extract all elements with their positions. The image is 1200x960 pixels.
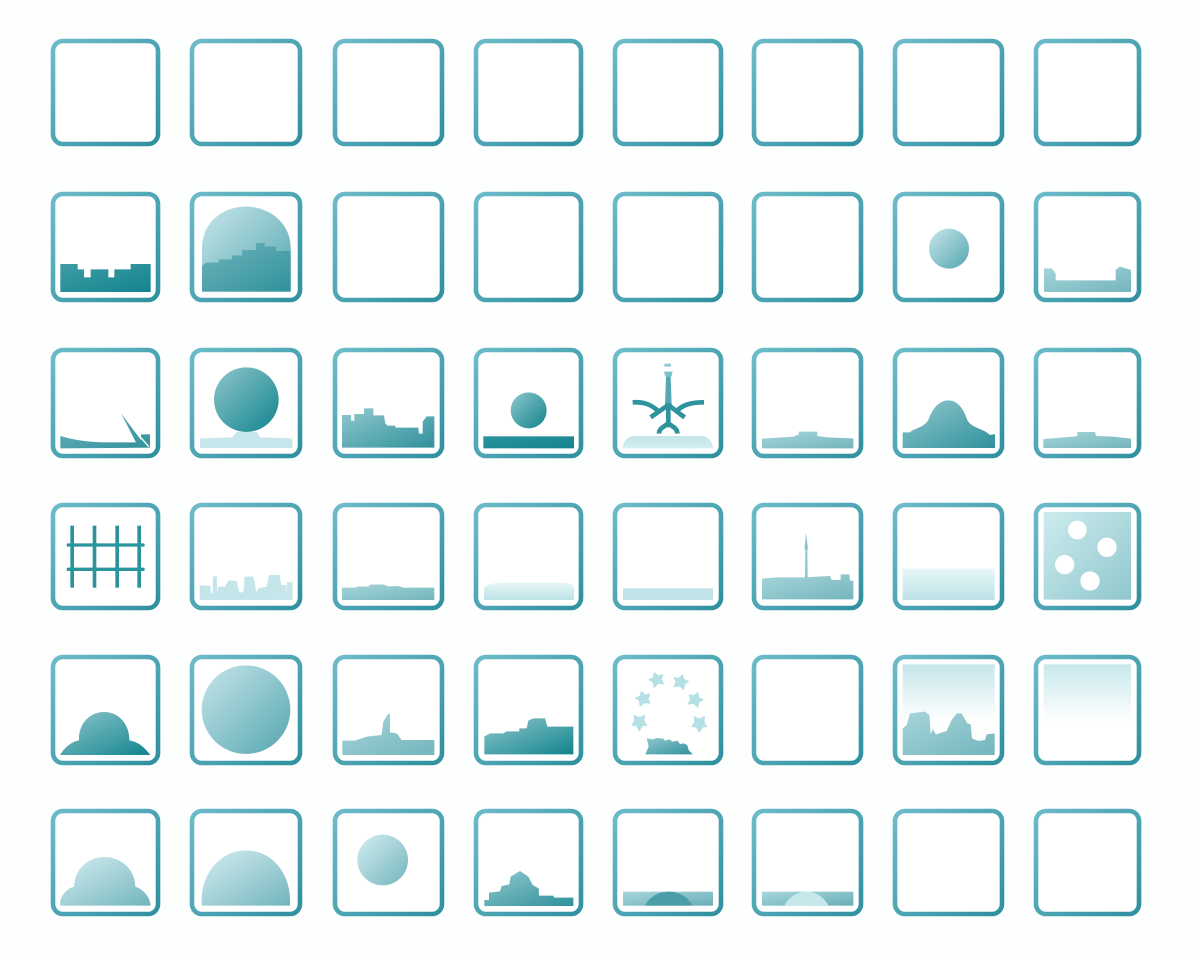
- icon: sphere over bar: [483, 392, 574, 448]
- tile r2c3: empty: [335, 194, 442, 300]
- icon: pale mound: [484, 583, 574, 600]
- tile r6c3: circle: [335, 811, 442, 914]
- tile r4c6: tower and town: [754, 505, 861, 608]
- icon: lattice: [67, 526, 145, 588]
- tile r2c2: dome with skyline: [192, 194, 300, 300]
- tile r2c6: empty: [754, 194, 861, 300]
- icon: flat ridge: [342, 584, 434, 600]
- icon: tower and town: [762, 533, 853, 599]
- icon: band with dark arc: [623, 892, 713, 906]
- icon: dome and steps: [202, 207, 291, 292]
- icon: branching tree: [623, 364, 713, 448]
- tile r4c8: panel with dots: [1036, 505, 1139, 608]
- tile r3c5: tree: [615, 350, 721, 456]
- icon: ring of stars: [632, 670, 707, 754]
- tile r2c5: empty: [615, 194, 721, 300]
- tile r4c1: lattice: [53, 505, 158, 608]
- tile r2c1: battlement: [53, 194, 158, 300]
- icon: pale skyline: [200, 575, 293, 600]
- tile r6c8: empty: [1036, 811, 1139, 914]
- icon: half dome: [202, 850, 290, 906]
- icon: low ridge: [762, 432, 853, 448]
- tile r5c7: sky and skyline: [895, 657, 1002, 763]
- icon: large circle: [202, 665, 290, 754]
- icon: basin silhouette: [1044, 267, 1131, 292]
- tile r3c4: sphere over bar: [476, 350, 581, 456]
- icon: spire on land: [342, 714, 434, 755]
- tile r2c7: circle: [895, 194, 1002, 300]
- icon: panel with dots: [1044, 512, 1131, 600]
- icon: terraced block: [484, 718, 573, 754]
- icon: battlement silhouette: [60, 264, 151, 292]
- tile r3c3: skyline: [335, 350, 442, 456]
- icon: skyline: [342, 408, 434, 448]
- tile r6c5: band with dark arc: [615, 811, 721, 914]
- icon: pale cloud dome: [60, 857, 151, 906]
- icon: hill: [903, 400, 995, 448]
- tile r4c5: pale bar: [615, 505, 721, 608]
- icon: circle: [929, 229, 969, 269]
- tile r4c3: flat ridge: [335, 505, 442, 608]
- icon: sphere on plinth: [200, 367, 292, 448]
- icon: boat wedge: [60, 413, 150, 448]
- tile r2c4: empty: [476, 194, 581, 300]
- icon: fading sky: [1044, 664, 1131, 721]
- icon: dark cloud dome: [60, 712, 150, 755]
- tile r4c2: pale skyline: [192, 505, 300, 608]
- tile r6c6: band with light arc: [754, 811, 861, 914]
- tile r6c2: half dome: [192, 811, 300, 914]
- tile r4c4: pale mound: [476, 505, 581, 608]
- tile r5c1: dark cloud dome: [53, 657, 158, 763]
- tile r4c7: pale gradient band: [895, 505, 1002, 608]
- tile r5c4: terraced block: [476, 657, 581, 763]
- tile r5c8: fading sky: [1036, 657, 1139, 763]
- icon: low ridge: [1043, 432, 1131, 448]
- icon: pale bar: [623, 588, 713, 600]
- tile r6c4: peak: [476, 811, 581, 914]
- icon: pale band: [903, 569, 995, 600]
- tile r3c7: hill: [895, 350, 1002, 456]
- tile r5c5: ring of stars over rubble: [615, 657, 721, 763]
- tile r2c8: basin: [1036, 194, 1139, 300]
- tile r3c1: boat wedge: [53, 350, 158, 456]
- tile r5c3: spire on land: [335, 657, 442, 763]
- tile r5c2: large circle: [192, 657, 300, 763]
- icon: sky and skyline: [903, 664, 995, 755]
- tile r3c2: sphere on plinth: [192, 350, 300, 456]
- icon: band with light arc: [762, 892, 853, 906]
- tile r6c7: empty: [895, 811, 1002, 914]
- tile r5c6: empty: [754, 657, 861, 763]
- tile r3c8: low ridge: [1036, 350, 1139, 456]
- tile r3c6: low ridge: [754, 350, 861, 456]
- icon: circle: [357, 835, 408, 885]
- icon: peak: [484, 871, 573, 906]
- tile r6c1: pale cloud dome: [53, 811, 158, 914]
- row 1: empty tiles: [53, 41, 1139, 144]
